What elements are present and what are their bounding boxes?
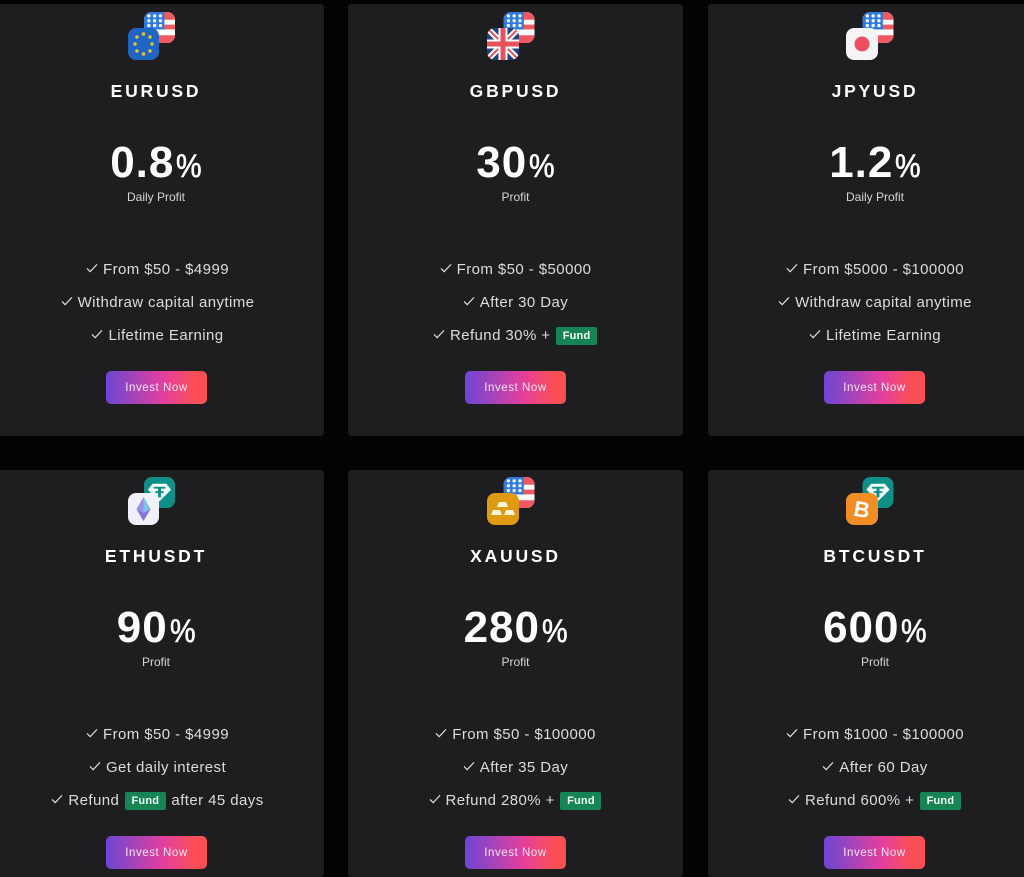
button: invest now: Invest Now: [843, 382, 906, 394]
feature: duration: After 30 Day: [480, 294, 568, 311]
profit value: 30: [476, 138, 527, 187]
button: invest now: Invest Now: [843, 847, 906, 859]
feature: earning: Lifetime Earning: [108, 327, 224, 344]
icon: euro and US flags: [128, 12, 175, 60]
heading: GBPUSD: GBPUSD: [470, 81, 561, 101]
heading: XAUUSD: XAUUSD: [470, 546, 561, 566]
icon: Bitcoin and Tether: [846, 477, 894, 525]
profit label: Daily Profit: [846, 190, 904, 204]
feature: refund: [434, 327, 597, 345]
profit value: 280: [464, 603, 540, 652]
button: invest now: [106, 836, 207, 869]
panel: ETHUSDT: [0, 470, 324, 877]
feature: range: From $50 - $100000: [452, 726, 596, 743]
panel: GBPUSD: [348, 4, 683, 436]
feature: refund: Fund: [927, 795, 954, 807]
feature: refund: Fund: [567, 795, 595, 807]
panel: BTCUSDT: [708, 470, 1024, 877]
heading: ETHUSDT: ETHUSDT: [105, 546, 207, 566]
feature: refund: Refund 280% +: [446, 792, 555, 809]
button: invest now: Invest Now: [125, 382, 188, 394]
feature: range: From $1000 - $100000: [803, 726, 964, 743]
button: invest now: [106, 371, 207, 404]
feature: duration: After 60 Day: [839, 759, 928, 776]
feature: withdraw: Withdraw capital anytime: [78, 294, 254, 311]
feature: withdraw: Withdraw capital anytime: [795, 294, 972, 311]
profit label: Profit: [501, 190, 530, 204]
heading: JPYUSD: JPYUSD: [832, 81, 918, 101]
heading: EURUSD: EURUSD: [111, 81, 201, 101]
heading: BTCUSDT: BTCUSDT: [823, 546, 927, 566]
feature: refund: Refund 600% +: [805, 792, 914, 809]
feature: duration: After 35 Day: [480, 759, 568, 776]
profit value: %: [901, 613, 927, 649]
profit value: [829, 138, 921, 187]
icon: Japan and US flags: [846, 12, 894, 60]
icon: gold and US flag: [487, 477, 534, 525]
profit value: %: [895, 148, 921, 184]
profit value: [476, 138, 555, 187]
feature: range: From $50 - $4999: [103, 726, 229, 743]
feature: refund: [430, 792, 601, 810]
feature: interest: Get daily interest: [106, 759, 226, 776]
feature: refund: Fund: [563, 330, 590, 342]
profit value: 1.2: [829, 138, 893, 187]
profit value: [117, 603, 195, 652]
profit value: %: [529, 148, 555, 184]
profit label: Daily Profit: [127, 190, 185, 204]
profit value: 600: [823, 603, 899, 652]
profit value: %: [542, 613, 568, 649]
profit value: %: [170, 613, 195, 649]
panel: XAUUSD: [348, 470, 683, 877]
button: invest now: [824, 836, 925, 869]
feature: refund: Refund 30% +: [450, 327, 550, 344]
icon: Bitcoin and Tether: B: [852, 496, 872, 523]
profit value: 0.8: [110, 138, 174, 187]
feature: range: From $50 - $50000: [457, 261, 591, 278]
icon: Ethereum and Tether: [128, 477, 175, 525]
panel: EURUSD: [0, 4, 324, 436]
button: invest now: Invest Now: [125, 847, 188, 859]
profit label: Profit: [142, 655, 170, 669]
feature: refund: Fund: [132, 795, 159, 807]
feature: range: From $5000 - $100000: [803, 261, 964, 278]
button: invest now: Invest Now: [484, 847, 547, 859]
icon: UK and US flags: [487, 12, 534, 60]
profit label: Profit: [861, 655, 889, 669]
button: invest now: Invest Now: [484, 382, 547, 394]
feature: range: From $50 - $4999: [103, 261, 229, 278]
panel: JPYUSD: [708, 4, 1024, 436]
button: invest now: [465, 836, 566, 869]
feature: refund: Refund after 45 days: [68, 792, 264, 809]
profit value: [110, 138, 202, 187]
button: invest now: [465, 371, 566, 404]
feature: refund: [788, 792, 961, 810]
profit label: Profit: [501, 655, 530, 669]
feature: earning: Lifetime Earning: [826, 327, 941, 344]
profit value: %: [176, 148, 202, 184]
profit value: 90: [117, 603, 168, 652]
button: invest now: [824, 371, 925, 404]
